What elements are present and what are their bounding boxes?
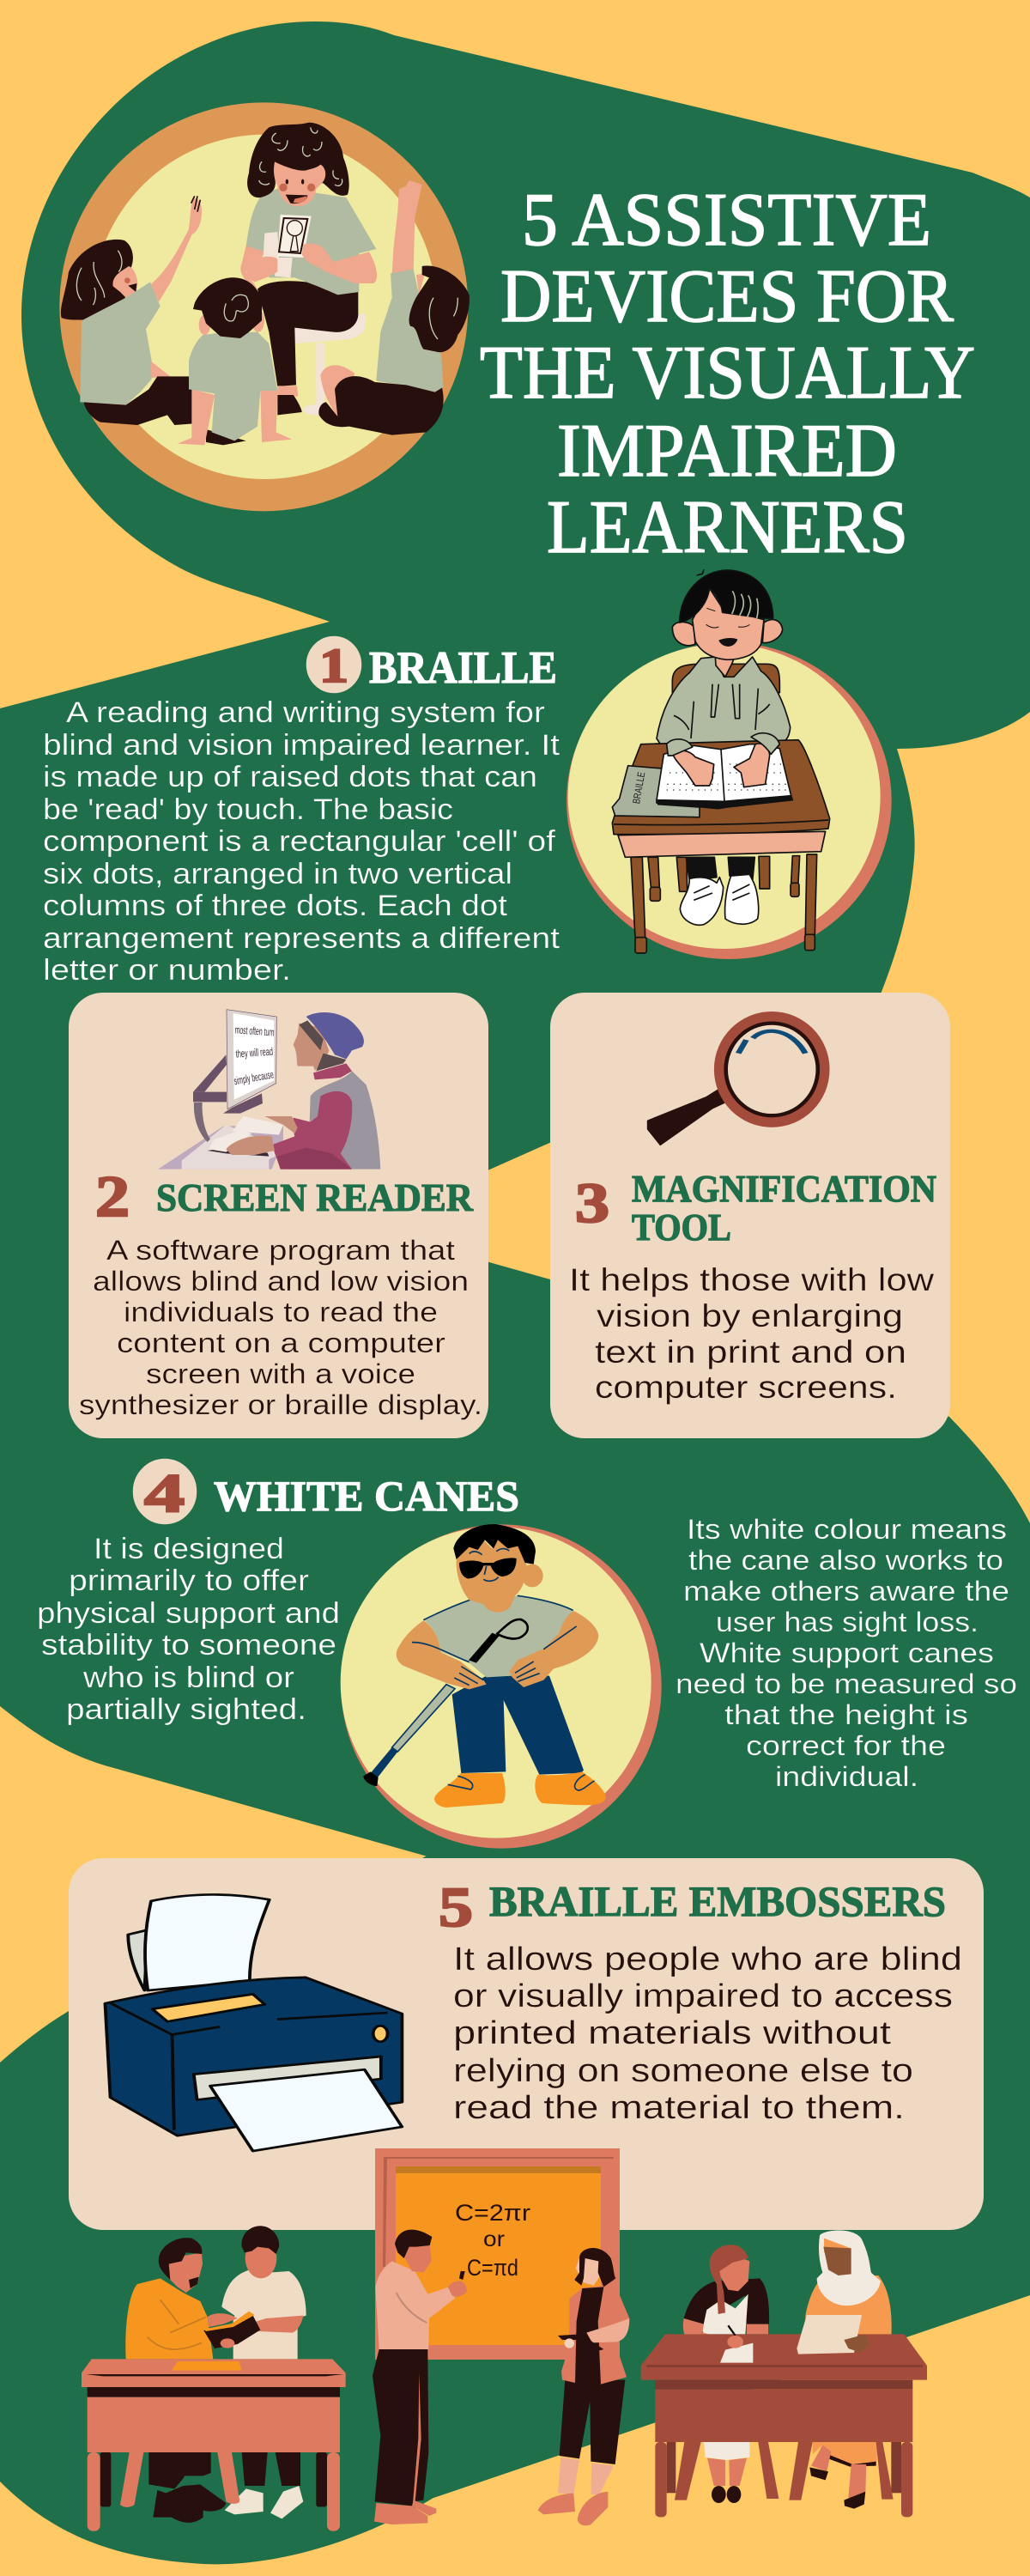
section 1 text: [43, 696, 560, 987]
illustration: person at screen: most often turn: [234, 1024, 275, 1039]
title: [480, 179, 975, 569]
illustration: person at screen: simply because: [233, 1068, 275, 1087]
panel: screen reader: content on a computer: [117, 1327, 445, 1358]
panel: screen reader: screen with a voice: [146, 1358, 415, 1389]
panel: screen reader: individuals to read the: [124, 1297, 438, 1327]
illustration: boy reading braille at desk: [566, 569, 892, 959]
section 1 text: arrangement represents a different: [43, 922, 560, 955]
panel: screen reader: 2: [95, 1163, 130, 1229]
section 4 right text: [676, 1514, 1017, 1792]
panel: braille embossers: [69, 1858, 984, 2230]
section 4 left text: who is blind or: [82, 1662, 294, 1694]
panel: braille embossers: read the material to them.: [453, 2090, 905, 2126]
section 1 text: be 'read' by touch. The basic: [43, 793, 453, 826]
section 4 right text: make others aware the: [683, 1576, 1009, 1607]
section 1 text: blind and vision impaired learner. It: [43, 729, 560, 762]
title: 5 ASSISTIVE: [522, 179, 931, 262]
section 4 left text: stability to someone: [41, 1629, 336, 1662]
title: LEARNERS: [547, 486, 908, 569]
illustration: person at screen: they will read: [235, 1046, 273, 1060]
panel: magnification tool: It helps those with low: [569, 1262, 934, 1297]
title: IMPAIRED: [557, 410, 897, 493]
title: DEVICES FOR: [500, 255, 954, 338]
section 4 right text: Its white colour means: [687, 1514, 1007, 1545]
section 1 heading: Braille: 1: [319, 640, 348, 693]
panel: screen reader: synthesizer or braille display.: [79, 1389, 482, 1420]
section 1 text: six dots, arranged in two vertical: [43, 858, 512, 890]
blackboard with formulas: or: [483, 2227, 505, 2251]
section 4 right text: that the height is: [724, 1699, 968, 1730]
illustration: classroom scene: [82, 2148, 927, 2531]
panel: magnification tool: [550, 993, 950, 1438]
section 4 right text: White support canes: [700, 1637, 994, 1668]
section 4 heading: white canes: WHITE CANES: [214, 1472, 519, 1520]
icon: printer: [105, 1894, 402, 2151]
section 4 heading: white canes: 4: [144, 1462, 185, 1523]
section 1 text: component is a rectangular 'cell' of: [43, 825, 555, 858]
blackboard with formulas: [375, 2148, 620, 2360]
standing woman and right pair at desk: [538, 2230, 927, 2525]
panel: braille embossers: relying on someone else to: [453, 2053, 913, 2089]
panel: screen reader: [69, 993, 488, 1438]
section 4 right text: the cane also works to: [688, 1545, 1003, 1576]
panel: braille embossers: printed materials without: [453, 2015, 892, 2051]
panel: magnification tool: MAGNIFICATION: [632, 1168, 936, 1210]
panel: braille embossers: It allows people who are blind: [453, 1941, 962, 1978]
section 1 text: is made up of raised dots that can: [43, 761, 537, 793]
panel: magnification tool: computer screens.: [595, 1370, 897, 1405]
panel: braille embossers: 5: [439, 1876, 473, 1939]
section 4 left text: partially sighted.: [66, 1693, 306, 1726]
blackboard with formulas: C=πd: [467, 2255, 518, 2281]
section 1 heading: Braille: [306, 635, 557, 694]
section 4 left text: primarily to offer: [69, 1564, 309, 1597]
panel: screen reader: A software program that: [106, 1235, 455, 1266]
section 4 right text: user has sight loss.: [716, 1607, 978, 1637]
left pair at desk and standing teacher: [82, 2226, 467, 2531]
section 4 heading: white canes: [132, 1458, 519, 1525]
section 4 left text: It is designed: [94, 1533, 284, 1565]
section 4 left text: physical support and: [37, 1597, 340, 1630]
illustration: person at screen: [158, 1010, 380, 1170]
section 1 text: letter or number.: [43, 954, 291, 987]
section 4 left text: [37, 1533, 340, 1726]
illustration: man with white cane: [341, 1524, 662, 1849]
section 1 text: columns of three dots. Each dot: [43, 890, 507, 922]
section 4 right text: need to be measured so: [676, 1668, 1017, 1699]
section 1 text: A reading and writing system for: [66, 696, 545, 729]
section 4 right text: correct for the: [746, 1730, 946, 1761]
title: THE VISUALLY: [480, 331, 975, 415]
illustration: boy reading braille at desk: BRAILLE: [630, 771, 647, 805]
panel: screen reader: allows blind and low vision: [93, 1266, 469, 1297]
illustration: teacher with children: [59, 102, 470, 511]
panel: braille embossers: BRAILLE EMBOSSERS: [489, 1877, 946, 1925]
panel: magnification tool: TOOL: [632, 1206, 731, 1249]
icon: magnifying glass: [647, 1012, 830, 1145]
panel: braille embossers: or visually impaired to access: [453, 1978, 953, 2014]
panel: magnification tool: text in print and on: [595, 1334, 906, 1370]
section 1 heading: Braille: BRAILLE: [369, 643, 557, 693]
panel: magnification tool: vision by enlarging: [597, 1298, 903, 1334]
blackboard with formulas: C=2πr: [455, 2200, 530, 2226]
panel: magnification tool: 3: [575, 1172, 609, 1235]
panel: screen reader: SCREEN READER: [156, 1176, 474, 1219]
section 4 right text: individual.: [775, 1761, 918, 1792]
